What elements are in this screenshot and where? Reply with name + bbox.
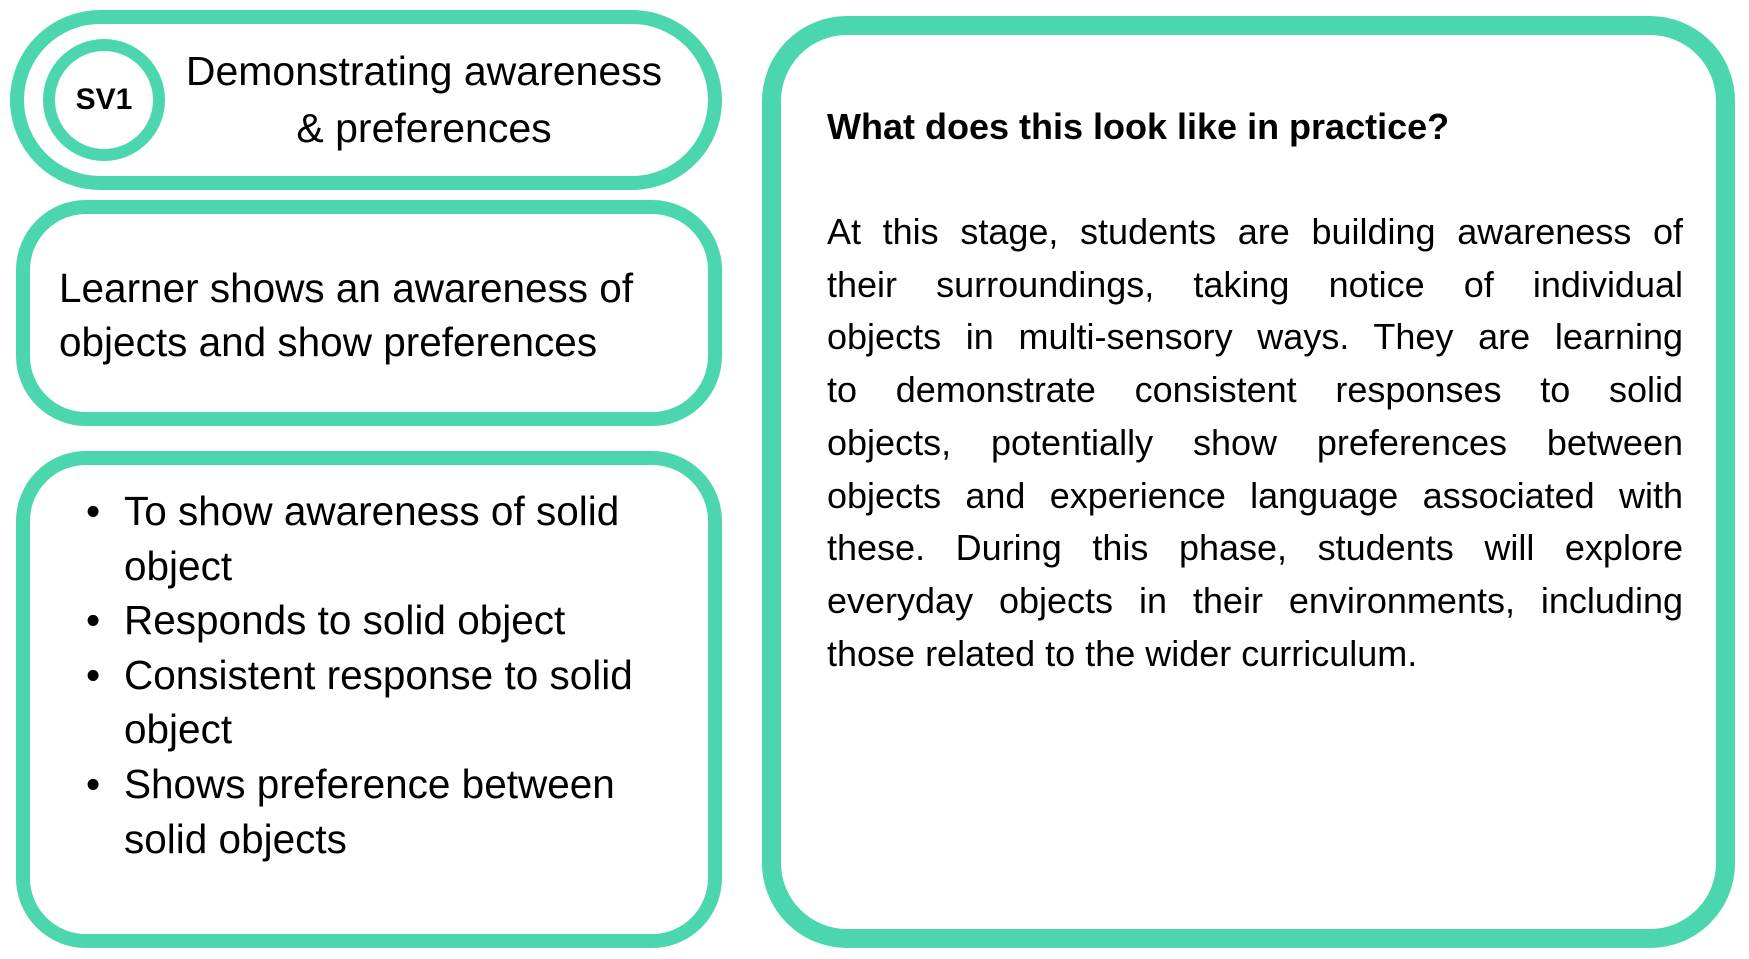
paragraph: their surroundings, taking notice of individual — [827, 264, 1683, 305]
panel: header — [10, 10, 722, 190]
bullet list: Shows preference between — [124, 761, 615, 807]
panel: bullet list — [16, 451, 722, 948]
heading: What does this look like in practice? — [827, 106, 1449, 147]
panel: description — [16, 200, 722, 426]
title: Demonstrating awareness — [186, 48, 662, 94]
bullet list: • — [86, 488, 100, 534]
description text: objects and show preferences — [59, 319, 597, 365]
bullet list: solid objects — [124, 816, 347, 862]
description text: Learner shows an awareness of — [59, 265, 633, 311]
bullet list: object — [124, 543, 232, 589]
paragraph: everyday objects in their environments, including — [827, 580, 1683, 621]
bullet list: Responds to solid object — [124, 597, 565, 643]
bullet list: • — [86, 761, 100, 807]
bullet list: To show awareness of solid — [124, 488, 619, 534]
description text — [59, 265, 634, 365]
panel: in practice — [762, 16, 1735, 948]
bullet list: • — [86, 597, 100, 643]
bullet list: Consistent response to solid — [124, 652, 633, 698]
paragraph: to demonstrate consistent responses to solid — [827, 369, 1683, 410]
icon: SV1 circle — [43, 39, 165, 161]
paragraph: those related to the wider curriculum. — [827, 633, 1417, 674]
icon: SV1 circle: SV1 — [76, 83, 132, 116]
title: & preferences — [296, 105, 552, 151]
paragraph: these. During this phase, students will explore — [827, 527, 1683, 568]
title — [186, 48, 662, 151]
paragraph — [827, 211, 1684, 674]
bullet list — [86, 488, 633, 862]
paragraph: objects in multi-sensory ways. They are learning — [827, 316, 1683, 357]
bullet list: object — [124, 706, 232, 752]
paragraph: objects, potentially show preferences between — [827, 422, 1683, 463]
paragraph: At this stage, students are building awareness of — [827, 211, 1683, 252]
paragraph: objects and experience language associated with — [827, 475, 1683, 516]
bullet list: • — [86, 652, 100, 698]
